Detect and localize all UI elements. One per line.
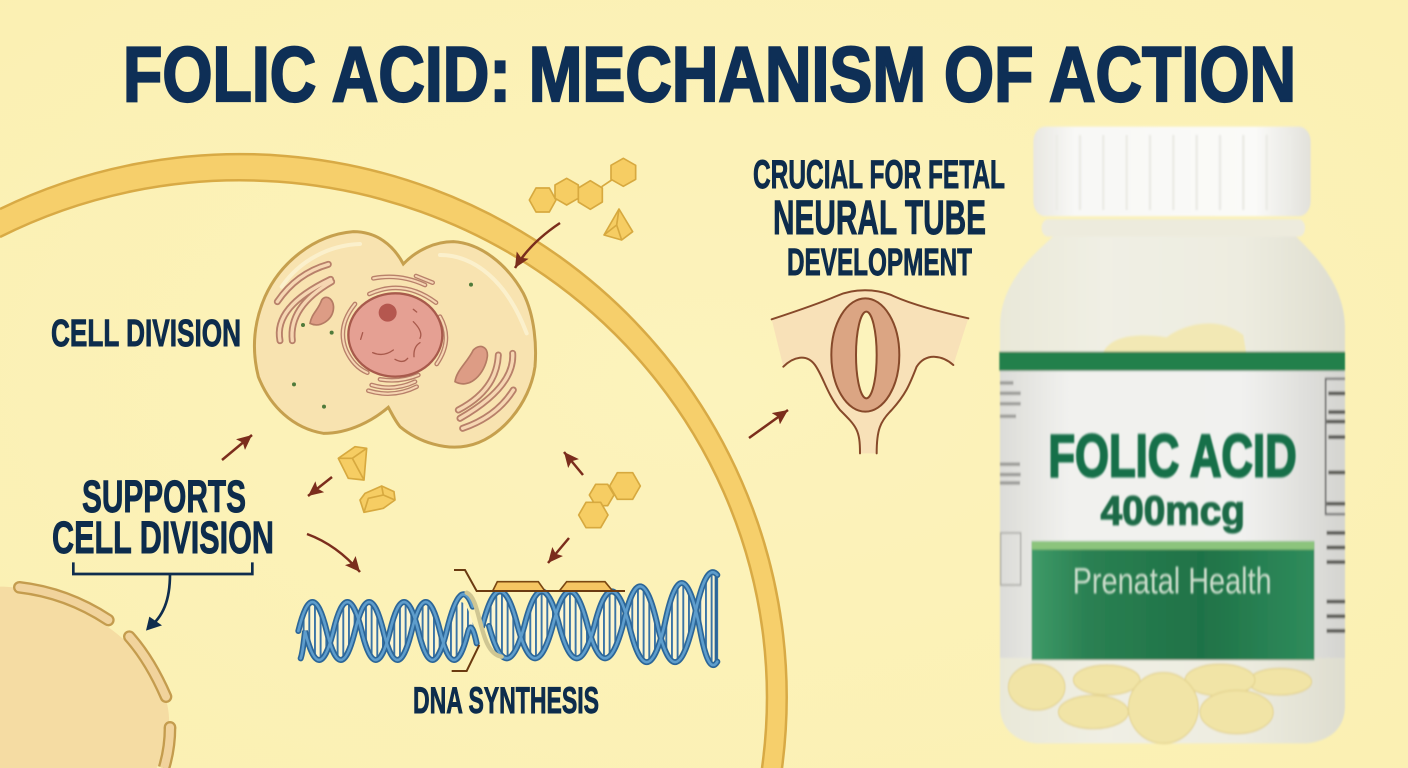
heading: neural tube development: CRUCIAL FOR FETAL bbox=[753, 153, 1005, 197]
tablets in shoulder bbox=[1102, 323, 1247, 356]
heading: neural tube development: DEVELOPMENT bbox=[787, 242, 972, 284]
heading: neural tube development bbox=[753, 153, 1005, 284]
left side label details bbox=[1000, 383, 1021, 483]
arrow: molecule to DNA bbox=[548, 538, 569, 563]
cell cytoplasm bbox=[0, 587, 169, 768]
cell highlights bbox=[282, 244, 527, 333]
DNA double helix bbox=[298, 570, 718, 671]
bottle text: 400mcg bbox=[1101, 488, 1245, 533]
helix strands light bbox=[298, 572, 717, 665]
nucleus bbox=[348, 293, 442, 377]
label: DNA synthesis: DNA SYNTHESIS bbox=[413, 680, 599, 721]
tube lumen bbox=[856, 312, 877, 398]
crystal: lower left bbox=[338, 447, 367, 480]
neural tube diagram bbox=[772, 290, 968, 453]
arrow: molecule to cell bbox=[564, 452, 583, 475]
supplement bottle bbox=[999, 127, 1345, 743]
dividing cell illustration bbox=[254, 232, 536, 447]
arrow: label to cell bbox=[222, 435, 252, 460]
nucleolus bbox=[379, 304, 397, 322]
bottle body bbox=[1000, 231, 1345, 743]
nuclear envelope arcs bbox=[343, 276, 446, 394]
bracket and arrow bbox=[73, 562, 252, 631]
label: supports cell division: CELL DIVISION bbox=[52, 512, 274, 563]
right golgi stack bbox=[458, 353, 513, 428]
green prenatal band bbox=[1032, 541, 1314, 660]
bottom tablets bbox=[1008, 664, 1312, 743]
folate molecules and crystals bbox=[338, 158, 640, 528]
outlines bbox=[772, 290, 968, 453]
left golgi stack bbox=[277, 264, 332, 341]
label: supports cell division: SUPPORTS bbox=[82, 471, 246, 522]
left mitochondrion bbox=[310, 297, 334, 325]
right mitochondrion bbox=[455, 347, 487, 384]
bottle text bbox=[1048, 423, 1297, 602]
molecule: upper chain bbox=[529, 158, 636, 212]
enzyme humps bbox=[493, 582, 613, 591]
arrow: to neural tube bbox=[749, 410, 788, 438]
label panel bbox=[1000, 354, 1345, 658]
beige new strand at fork bbox=[467, 593, 502, 657]
neighbouring cell with segmented membrane bbox=[0, 562, 252, 768]
cap bbox=[1033, 127, 1311, 216]
cap ribs bbox=[1057, 135, 1290, 210]
neck ring bbox=[1042, 219, 1305, 237]
cell body outline bbox=[254, 232, 536, 447]
label: supports cell division bbox=[52, 471, 274, 563]
crystal: pyramid bbox=[604, 209, 633, 240]
crystal: flat bbox=[360, 486, 395, 512]
heading: neural tube development: NEURAL TUBE bbox=[773, 192, 986, 245]
green granules bbox=[292, 283, 473, 409]
bottle text: Prenatal Health bbox=[1073, 561, 1272, 602]
left helix rungs bbox=[298, 602, 475, 660]
arrow: crystal to label bbox=[308, 477, 332, 496]
cell membrane band bbox=[0, 154, 787, 768]
tissue bbox=[772, 290, 968, 453]
chromatin bbox=[361, 309, 421, 361]
right side nutrition panel bbox=[1326, 379, 1345, 631]
arrow: into cell bbox=[515, 223, 560, 268]
green stripe bbox=[999, 352, 1345, 371]
membrane segments bbox=[19, 587, 176, 768]
arrow: label to DNA bbox=[307, 534, 360, 572]
molecule: lower hex trio bbox=[579, 473, 640, 528]
replication fork brackets bbox=[452, 570, 625, 671]
tube wall bbox=[831, 298, 899, 412]
bottle text: FOLIC ACID bbox=[1048, 423, 1297, 490]
label: cell division: CELL DIVISION bbox=[51, 313, 241, 355]
helix strands dark bbox=[298, 572, 717, 665]
right helix rungs bbox=[482, 572, 718, 666]
